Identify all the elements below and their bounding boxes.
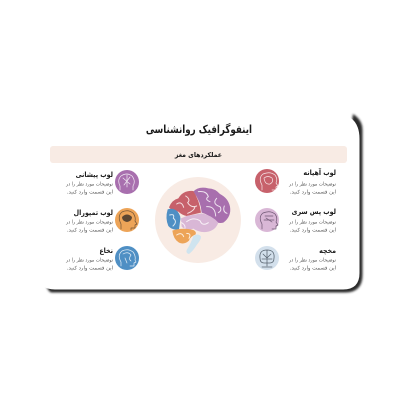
item: parietal lobe: توضیحات مورد نظر را در	[288, 181, 337, 188]
lobe: cerebellum orange	[172, 229, 196, 243]
item: occipital lobe: لوب پس سری	[292, 208, 336, 216]
card shadow	[46, 114, 362, 292]
item: occipital lobe: توضیحات مورد نظر را در	[288, 219, 337, 226]
item: frontal lobe	[65, 170, 139, 195]
icon: occipital lobe	[255, 208, 279, 232]
icon: parietal lobe	[255, 169, 279, 193]
section band	[50, 146, 347, 163]
item: temporal lobe: توضیحات مورد نظر را در	[65, 219, 114, 226]
lobe: temporal lilac	[181, 213, 218, 232]
item: parietal lobe	[255, 168, 337, 195]
section band: عملکردهای مغز	[174, 151, 222, 159]
item: cerebellum: مخچه	[319, 247, 336, 255]
item: medulla	[65, 246, 139, 271]
icon: medulla	[115, 246, 139, 270]
brain folds	[170, 192, 227, 238]
item: medulla: این قسمت وارد کنید.	[67, 266, 113, 271]
item: occipital lobe	[255, 208, 337, 233]
item: temporal lobe: این قسمت وارد کنید.	[67, 228, 113, 233]
card	[36, 114, 360, 290]
item: temporal lobe	[65, 208, 139, 233]
item: temporal lobe: لوب تمپورال	[74, 209, 113, 217]
lobe: frontal purple	[193, 188, 230, 223]
icon: temporal lobe	[115, 208, 139, 232]
icon: cerebellum	[255, 246, 279, 270]
brain illustration	[155, 177, 241, 263]
item: medulla: توضیحات مورد نظر را در	[65, 257, 114, 264]
item: parietal lobe: این قسمت وارد کنید.	[290, 190, 336, 195]
item: cerebellum: توضیحات مورد نظر را در	[288, 257, 337, 264]
item: frontal lobe: توضیحات مورد نظر را در	[65, 181, 114, 188]
lobe: occipital blue	[166, 209, 180, 230]
item: cerebellum: این قسمت وارد کنید.	[290, 266, 336, 271]
title: اینفوگرافیک روانشناسی	[146, 122, 252, 136]
item: medulla: نخاع	[99, 247, 113, 255]
item: cerebellum	[255, 246, 337, 271]
item: frontal lobe: این قسمت وارد کنید.	[67, 190, 113, 195]
brain stem	[186, 234, 201, 254]
lobe: parietal red	[169, 191, 201, 216]
item: frontal lobe: لوب پیشانی	[76, 171, 113, 179]
item: occipital lobe: این قسمت وارد کنید.	[290, 228, 336, 233]
icon: frontal lobe	[115, 170, 139, 194]
item: parietal lobe: لوب آهیانه	[303, 168, 336, 177]
